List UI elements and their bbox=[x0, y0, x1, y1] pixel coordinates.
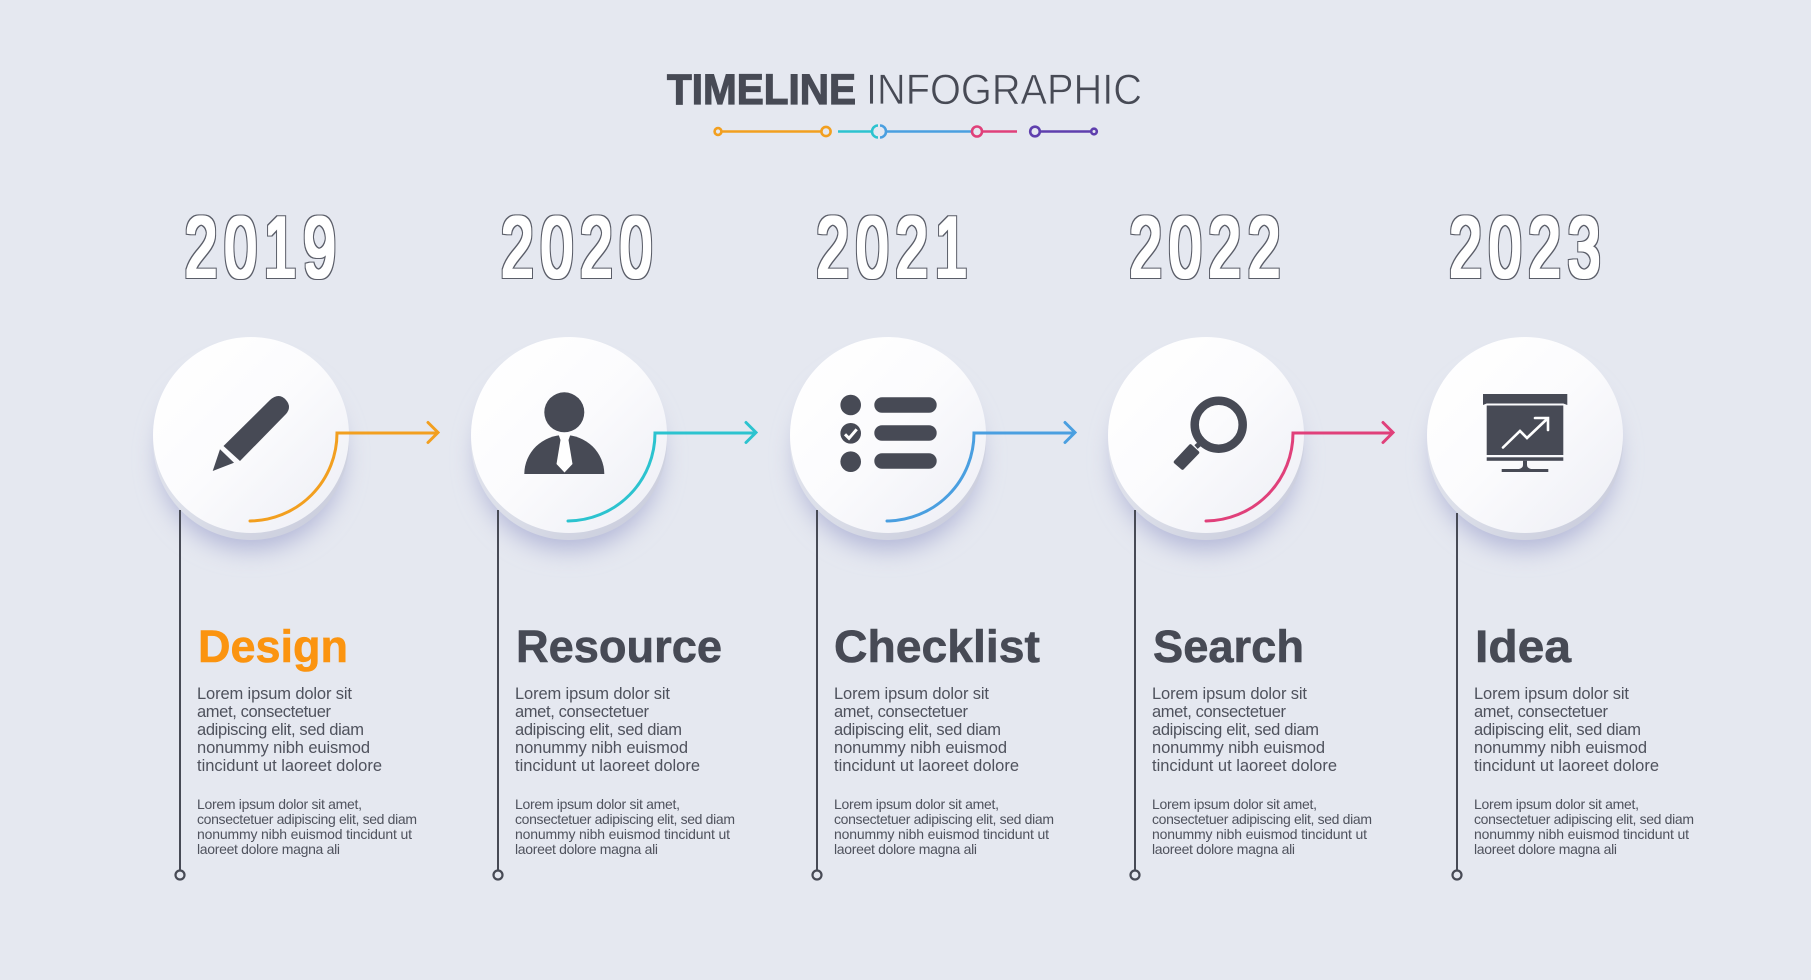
body text: amet, consectetuer bbox=[197, 703, 332, 721]
icon: presentation screen with chart bbox=[1483, 394, 1567, 472]
vertical line with end dot bbox=[176, 510, 184, 880]
small text bbox=[1152, 796, 1372, 857]
circle shadow and disc bbox=[153, 337, 349, 550]
body text bbox=[1152, 685, 1337, 775]
title bbox=[667, 66, 1142, 114]
small text: Lorem ipsum dolor sit amet, bbox=[1152, 796, 1317, 812]
small text bbox=[197, 796, 417, 857]
arrow bbox=[250, 422, 438, 521]
small text: nonummy nibh euismod tincidunt ut bbox=[197, 826, 412, 842]
heading: Checklist bbox=[834, 621, 1040, 672]
body text: Lorem ipsum dolor sit bbox=[1474, 685, 1629, 703]
body text: Lorem ipsum dolor sit bbox=[834, 685, 989, 703]
body text: Lorem ipsum dolor sit bbox=[197, 685, 352, 703]
heading: Idea bbox=[1475, 621, 1572, 672]
body text: amet, consectetuer bbox=[1152, 703, 1286, 721]
small text: nonummy nibh euismod tincidunt ut bbox=[1152, 826, 1367, 842]
step 2023 Idea bbox=[1427, 200, 1694, 879]
body text: adipiscing elit, sed diam bbox=[1152, 721, 1319, 739]
vertical line with end dot bbox=[1130, 510, 1140, 880]
body text: adipiscing elit, sed diam bbox=[1474, 721, 1641, 739]
body text: nonummy nibh euismod bbox=[834, 739, 1007, 757]
body text: amet, consectetuer bbox=[834, 703, 968, 721]
year 2022: 2022 bbox=[1130, 200, 1288, 295]
vertical line with end dot bbox=[812, 510, 822, 880]
body text: tincidunt ut laoreet dolore bbox=[1152, 757, 1337, 775]
step 2020 Resource bbox=[471, 200, 756, 879]
title: INFOGRAPHIC bbox=[866, 66, 1142, 114]
body text bbox=[1474, 685, 1659, 775]
body text: nonummy nibh euismod bbox=[1474, 739, 1647, 757]
step 2022 Search bbox=[1108, 200, 1393, 879]
small text: consectetuer adipiscing elit, sed diam bbox=[515, 811, 735, 827]
heading: Resource bbox=[516, 621, 722, 672]
body text: tincidunt ut laoreet dolore bbox=[515, 757, 700, 775]
vertical line with end dot bbox=[494, 510, 502, 880]
year 2021: 2021 bbox=[817, 200, 975, 295]
body text: nonummy nibh euismod bbox=[1152, 739, 1325, 757]
circle shadow and disc bbox=[1108, 337, 1304, 550]
small text: consectetuer adipiscing elit, sed diam bbox=[1474, 811, 1694, 827]
body text: adipiscing elit, sed diam bbox=[515, 721, 682, 739]
body text: tincidunt ut laoreet dolore bbox=[834, 757, 1019, 775]
small text: laoreet dolore magna ali bbox=[1474, 841, 1617, 857]
small text: consectetuer adipiscing elit, sed diam bbox=[1152, 811, 1372, 827]
body text: amet, consectetuer bbox=[1474, 703, 1608, 721]
step 2019 Design bbox=[153, 200, 438, 879]
small text: nonummy nibh euismod tincidunt ut bbox=[1474, 826, 1689, 842]
small text: consectetuer adipiscing elit, sed diam bbox=[834, 811, 1054, 827]
year 2020: 2020 bbox=[501, 200, 659, 295]
year 2019: 2019 bbox=[185, 200, 343, 295]
arrow bbox=[1206, 422, 1393, 521]
small text: laoreet dolore magna ali bbox=[1152, 841, 1295, 857]
small text: nonummy nibh euismod tincidunt ut bbox=[515, 826, 730, 842]
body text: adipiscing elit, sed diam bbox=[834, 721, 1001, 739]
small text: Lorem ipsum dolor sit amet, bbox=[197, 796, 362, 812]
icon: magnifier bbox=[1176, 401, 1243, 468]
small text: consectetuer adipiscing elit, sed diam bbox=[197, 811, 417, 827]
circle shadow and disc bbox=[790, 337, 986, 550]
arrow bbox=[568, 422, 756, 521]
step 2021 Checklist bbox=[790, 200, 1075, 879]
small text: laoreet dolore magna ali bbox=[515, 841, 658, 857]
small text: laoreet dolore magna ali bbox=[834, 841, 977, 857]
body text: tincidunt ut laoreet dolore bbox=[197, 757, 382, 775]
body text: tincidunt ut laoreet dolore bbox=[1474, 757, 1659, 775]
body text: amet, consectetuer bbox=[515, 703, 650, 721]
small text: Lorem ipsum dolor sit amet, bbox=[834, 796, 999, 812]
body text bbox=[834, 685, 1019, 775]
small text: nonummy nibh euismod tincidunt ut bbox=[834, 826, 1049, 842]
icon: checklist bbox=[840, 395, 937, 472]
title: TIMELINE bbox=[667, 66, 856, 114]
body text: adipiscing elit, sed diam bbox=[197, 721, 364, 739]
circle shadow and disc bbox=[471, 337, 667, 550]
body text bbox=[197, 685, 382, 775]
circle shadow and disc bbox=[1427, 337, 1623, 550]
body text: Lorem ipsum dolor sit bbox=[515, 685, 670, 703]
heading: Design bbox=[198, 621, 348, 672]
icon: person with tie bbox=[524, 392, 604, 474]
title decorative multicolor line bbox=[715, 126, 1097, 138]
body text bbox=[515, 685, 700, 775]
body text: nonummy nibh euismod bbox=[197, 739, 370, 757]
small text bbox=[834, 796, 1054, 857]
small text: Lorem ipsum dolor sit amet, bbox=[515, 796, 680, 812]
small text bbox=[515, 796, 735, 857]
small text: Lorem ipsum dolor sit amet, bbox=[1474, 796, 1639, 812]
body text: nonummy nibh euismod bbox=[515, 739, 688, 757]
vertical line with end dot bbox=[1452, 513, 1462, 880]
arrow bbox=[887, 422, 1075, 521]
small text: laoreet dolore magna ali bbox=[197, 841, 340, 857]
heading: Search bbox=[1153, 621, 1304, 672]
body text: Lorem ipsum dolor sit bbox=[1152, 685, 1307, 703]
icon: pencil bbox=[213, 396, 289, 471]
small text bbox=[1474, 796, 1694, 857]
year 2023: 2023 bbox=[1450, 200, 1607, 295]
